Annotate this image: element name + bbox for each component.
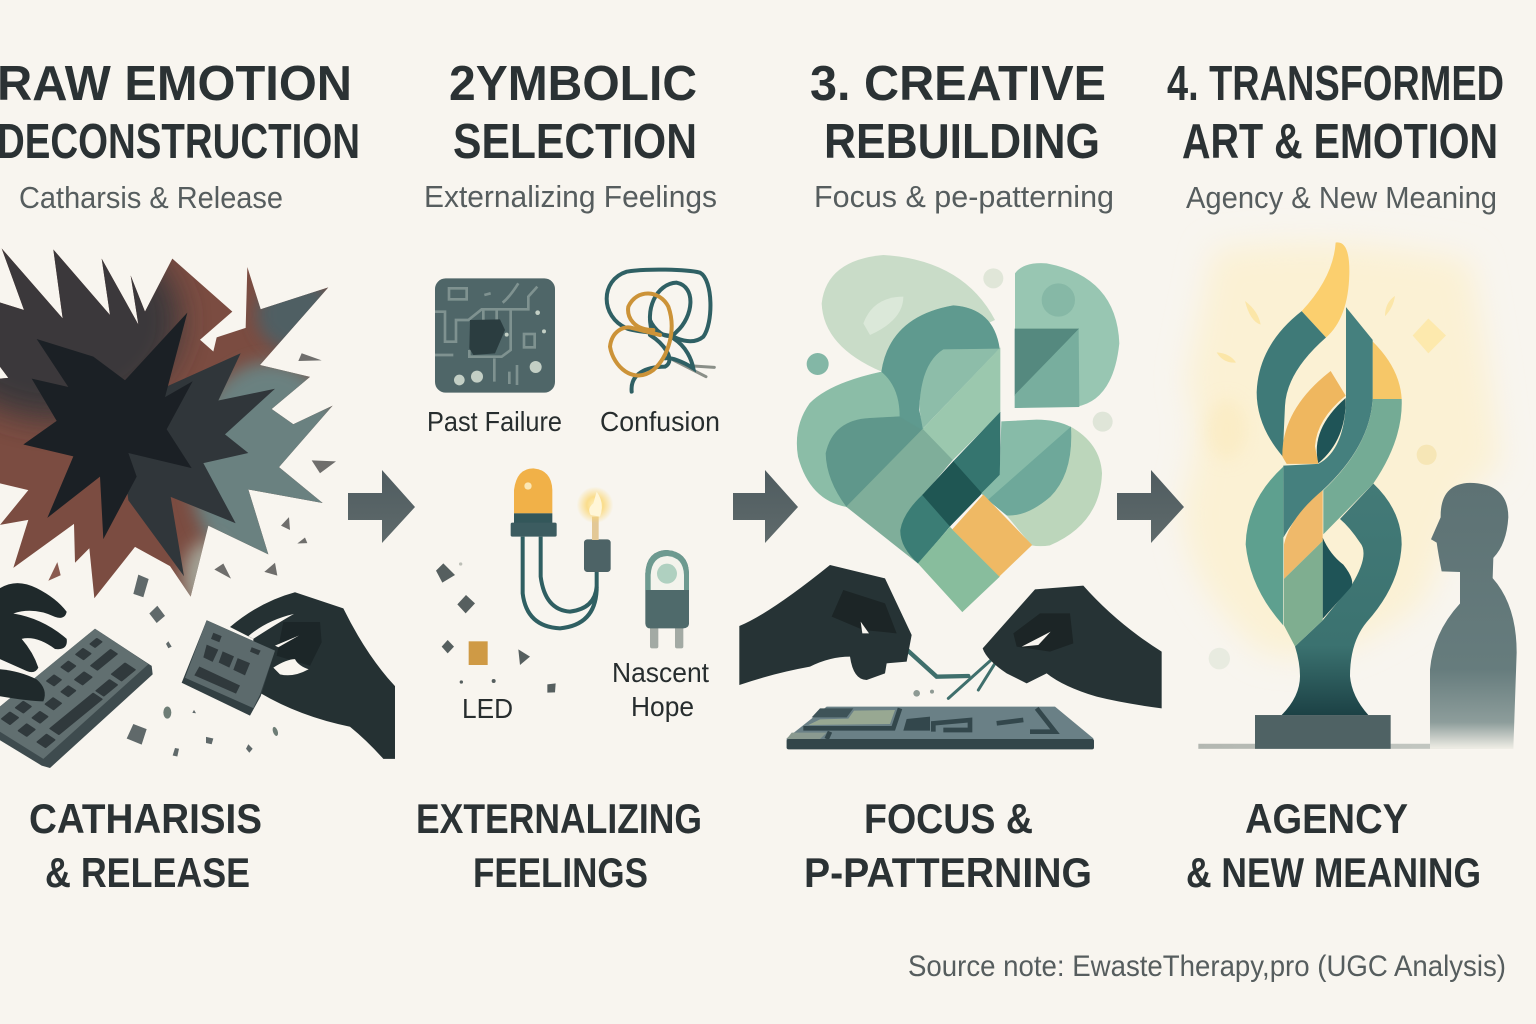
arrow: step 3 to 4 [1117, 470, 1184, 543]
floor shadow [1198, 744, 1513, 749]
plinth [1255, 715, 1391, 749]
heading: step 2: Externalizing Feelings [424, 179, 717, 214]
heading: step 3 [810, 57, 1114, 214]
icon: tangled wires, confusion [607, 270, 714, 392]
labels: symbolic objects: Hope [631, 691, 694, 722]
labels: symbolic objects [427, 406, 720, 724]
icon: nascent hope plug [645, 550, 689, 648]
caption: externalizing: FEELINGS [473, 849, 648, 896]
heading: step 1: DECONSTRUCTION [0, 115, 360, 169]
caption: focus [804, 795, 1092, 896]
illustration: symbolic selection objects [435, 270, 714, 693]
caption: catharsis: CATHARISIS [29, 795, 262, 842]
heading: step 2: SELECTION [453, 115, 697, 169]
labels: symbolic objects: LED [462, 693, 513, 724]
icon: right hand [230, 592, 395, 759]
icon: solder specks [913, 690, 934, 697]
labels: symbolic objects: Nascent [612, 657, 709, 688]
glow behind sculpture [1183, 244, 1500, 669]
icon: broken circuit board [182, 620, 275, 716]
icon: right working hand [983, 586, 1162, 708]
illustration: creative rebuilding [739, 255, 1162, 749]
heading: step 3: REBUILDING [824, 115, 1100, 169]
caption: focus: FOCUS & [864, 795, 1033, 842]
heading: step 2 [424, 57, 717, 214]
heading: step 2: 2YMBOLIC [449, 57, 697, 111]
icon: broken keyboard [0, 629, 153, 768]
heading: step 4: Agency & New Meaning [1186, 180, 1497, 215]
scattered fragments [436, 562, 556, 693]
arrow: step 2 to 3 [733, 470, 798, 543]
caption: agency: AGENCY [1245, 795, 1408, 842]
flying shards [48, 353, 336, 756]
caption: externalizing: EXTERNALIZING [416, 795, 702, 842]
icon: left thumb [0, 669, 45, 701]
heading: step 1: Catharsis & Release [19, 180, 283, 215]
arrow: step 1 to 2 [348, 470, 415, 543]
heading: step 3: Focus & pe-patterning [814, 179, 1114, 214]
icon: twisted sculpture [1246, 242, 1402, 715]
heading: step 3: 3. CREATIVE [810, 57, 1106, 111]
heading: step 1: RAW EMOTION [0, 57, 352, 111]
caption: catharsis: & RELEASE [45, 849, 250, 896]
caption: focus: P-PATTERNING [804, 849, 1092, 896]
icon: circuit board, past failure [435, 278, 555, 393]
heading: step 1 [0, 57, 360, 215]
caption: agency [1186, 795, 1481, 896]
icon: viewer silhouette [1430, 483, 1517, 749]
icon: circuit board base [787, 707, 1094, 749]
heading: step 4 [1167, 57, 1504, 215]
illustration: transformed art sculpture and viewer [1183, 242, 1517, 749]
labels: symbolic objects: Past Failure [427, 406, 562, 437]
icon: left hand [0, 583, 67, 672]
icon: LED on wire [511, 468, 613, 628]
icon: explosion burst [0, 248, 332, 598]
icon: tweezers [902, 645, 997, 698]
icon: rebuilt heart [797, 255, 1119, 612]
labels: symbolic objects: Confusion [600, 406, 720, 437]
caption: catharsis [29, 795, 262, 896]
caption: externalizing [416, 795, 702, 896]
caption: agency: & NEW MEANING [1186, 849, 1481, 896]
illustration: raw emotion explosion and breaking e-waste [0, 223, 395, 768]
icon: left working hand [739, 565, 912, 685]
